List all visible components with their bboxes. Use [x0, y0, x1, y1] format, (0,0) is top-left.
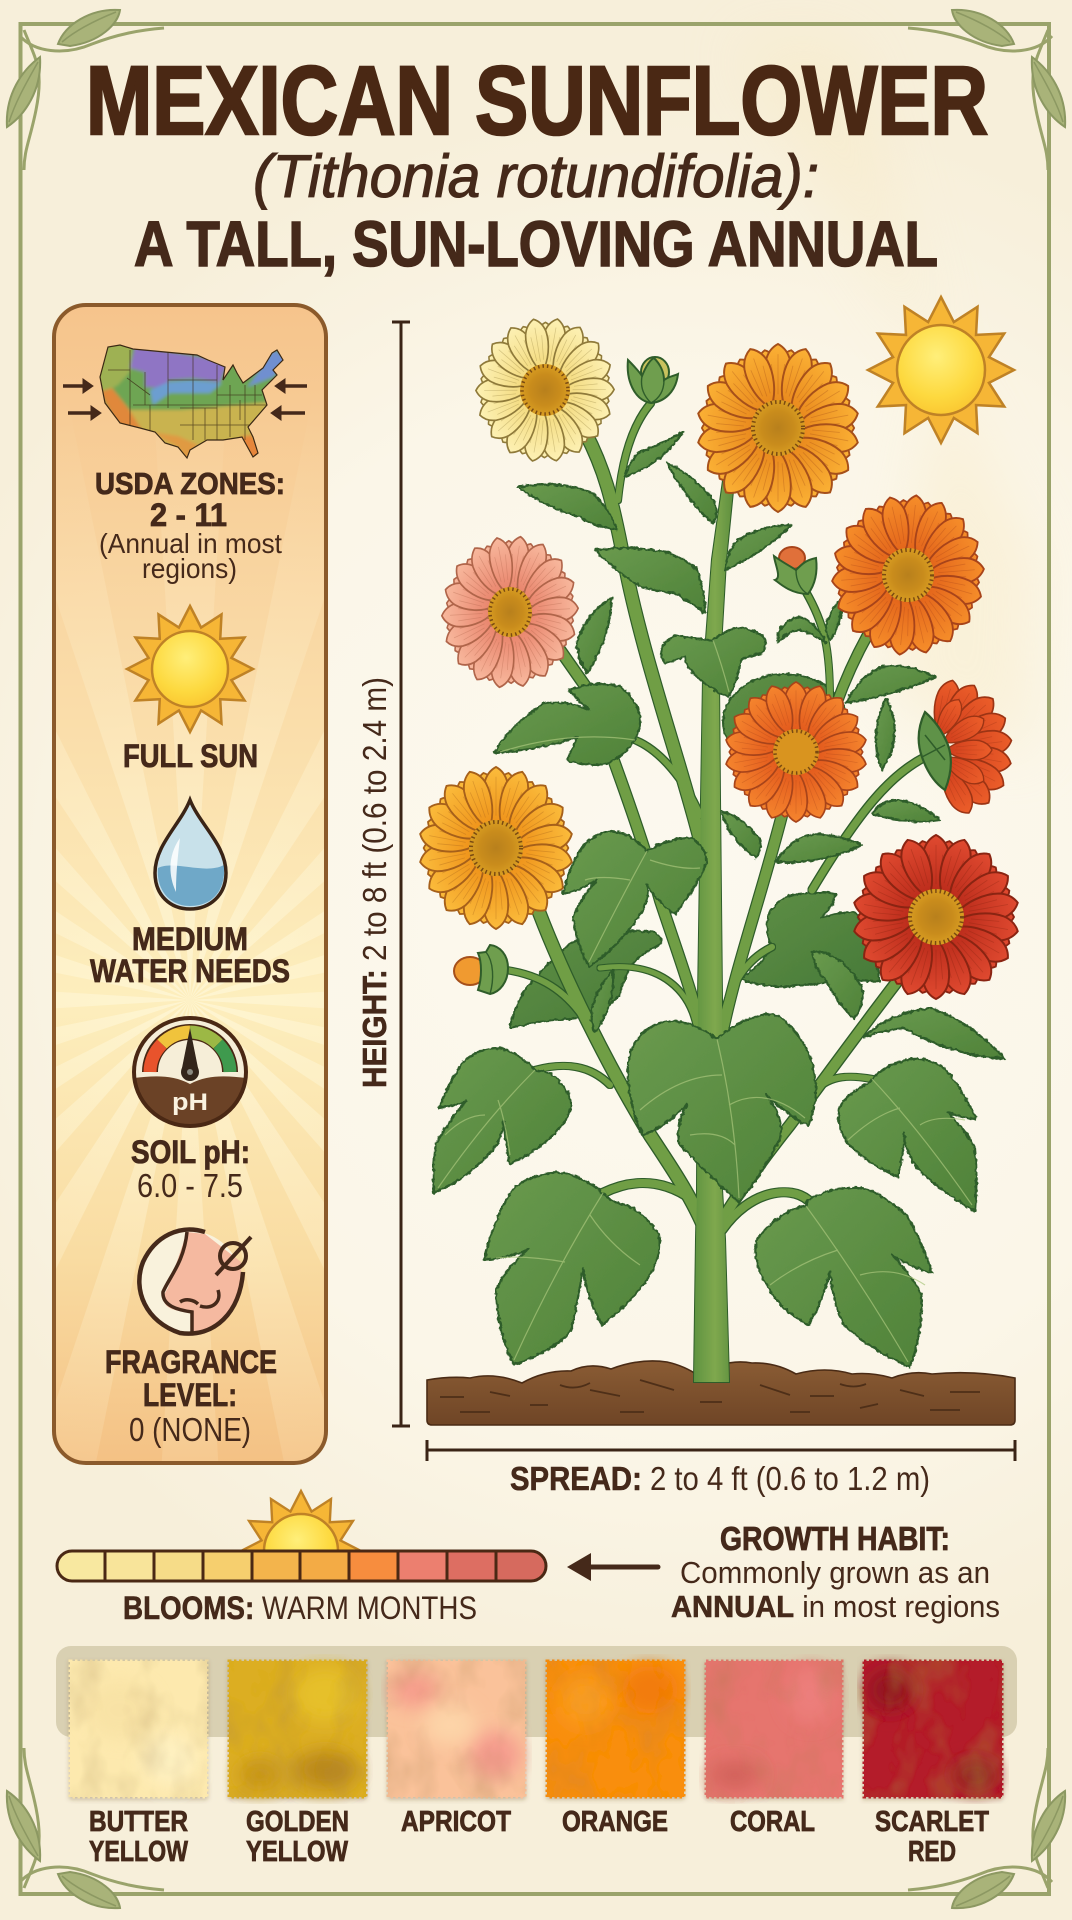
title [86, 46, 988, 280]
stems [506, 403, 925, 1382]
icon: pH gauge: pH [172, 1089, 208, 1116]
flower: middle orange red [724, 682, 868, 822]
leaf: middle left [433, 1048, 571, 1193]
flower: side view red orange [919, 678, 1013, 818]
swatch labels: SCARLET [875, 1806, 989, 1838]
water needs label: MEDIUM [132, 921, 248, 957]
leaf: central large [628, 1014, 816, 1202]
swatch labels [89, 1806, 989, 1868]
leaf: middle right [838, 1059, 976, 1211]
USDA zones text: regions) [142, 553, 237, 584]
spread dimension line [427, 1440, 1015, 1461]
swatch labels: GOLDEN [246, 1806, 349, 1838]
swatch: scarlet red [864, 1661, 1002, 1797]
flower: scarlet red [852, 835, 1020, 999]
flower: apricot [431, 527, 589, 697]
water needs label: WATER NEEDS [90, 953, 290, 989]
growth habit text [671, 1520, 1000, 1624]
fragrance label [105, 1344, 277, 1448]
leaf: bottom right [755, 1187, 932, 1367]
foreground leaves [433, 432, 1005, 1367]
soil [427, 1361, 1015, 1425]
icon: water drop [155, 800, 226, 909]
icon: map arrows [63, 379, 307, 420]
fragrance label: FRAGRANCE [105, 1344, 277, 1380]
bud: right [774, 547, 817, 594]
flower: right orange [823, 487, 993, 663]
swatch labels: RED [908, 1836, 956, 1868]
flower: golden left [418, 767, 574, 929]
bloom month bar [57, 1551, 546, 1581]
background leaves [510, 674, 880, 1028]
USDA zones text [95, 466, 285, 584]
icon: sun over plant [868, 297, 1014, 443]
bud: top [628, 357, 678, 403]
panel: growing requirements [52, 303, 328, 1465]
bloom timeline [57, 1491, 546, 1626]
fragrance label: LEVEL: [143, 1377, 237, 1413]
leaf: bottom left [484, 1173, 660, 1365]
fragrance label: 0 (NONE) [129, 1411, 251, 1448]
swatch labels: BUTTER [89, 1806, 188, 1838]
leaf veins [438, 640, 972, 1362]
height label: HEIGHT: 2 to 8 ft (0.6 to 2.4 m) [356, 677, 393, 1088]
flower: butter yellow [464, 307, 626, 473]
sun glow rays [730, 40, 1040, 760]
height dimension line [392, 322, 410, 1426]
swatch: orange [547, 1661, 684, 1797]
swatch: golden yellow [229, 1661, 366, 1797]
panel sunburst rays [56, 542, 324, 1461]
panel: flower colour swatches [56, 1646, 1017, 1868]
bud: left [454, 945, 508, 994]
full sun label: FULL SUN [123, 738, 258, 774]
plant illustration [418, 307, 1020, 1382]
swatch labels: YELLOW [246, 1836, 349, 1868]
swatch labels: APRICOT [401, 1806, 511, 1838]
USDA zones text: USDA ZONES: [95, 466, 285, 501]
USDA zones text: (Annual in most [99, 528, 282, 559]
soil pH label [131, 1134, 250, 1204]
growth habit text: Commonly grown as an [680, 1555, 990, 1590]
swatch: coral [706, 1661, 842, 1797]
swatch: butter yellow [70, 1661, 207, 1797]
arrow: growth habit to bloom bar [567, 1553, 658, 1581]
growth habit text: ANNUAL in most regions [671, 1589, 1000, 1624]
flower: top orange [696, 344, 860, 512]
title: A TALL, SUN-LOVING ANNUAL [134, 208, 938, 280]
blooms label: BLOOMS: WARM MONTHS [123, 1590, 477, 1626]
icon: rising sun [242, 1488, 360, 1550]
title: (Tithonia rotundifolia): [253, 143, 819, 210]
water needs label [90, 921, 290, 989]
USDA zones text: 2 - 11 [150, 497, 227, 533]
swatch labels: ORANGE [562, 1806, 668, 1838]
icon: nose no fragrance [139, 1230, 251, 1334]
spread label: SPREAD: 2 to 4 ft (0.6 to 1.2 m) [510, 1460, 930, 1497]
soil pH label: 6.0 - 7.5 [137, 1167, 243, 1204]
soil pH label: SOIL pH: [131, 1134, 250, 1170]
swatch: apricot [388, 1661, 525, 1797]
swatch labels: YELLOW [89, 1836, 188, 1868]
icon: USA zone map [99, 344, 284, 459]
growth habit text: GROWTH HABIT: [720, 1520, 950, 1557]
leaf: upper left large [563, 831, 707, 967]
leaf: small side leaves [494, 432, 1005, 1059]
icon: full sun [127, 606, 253, 732]
swatch labels: CORAL [730, 1806, 815, 1838]
icon: pH gauge [134, 1018, 246, 1126]
